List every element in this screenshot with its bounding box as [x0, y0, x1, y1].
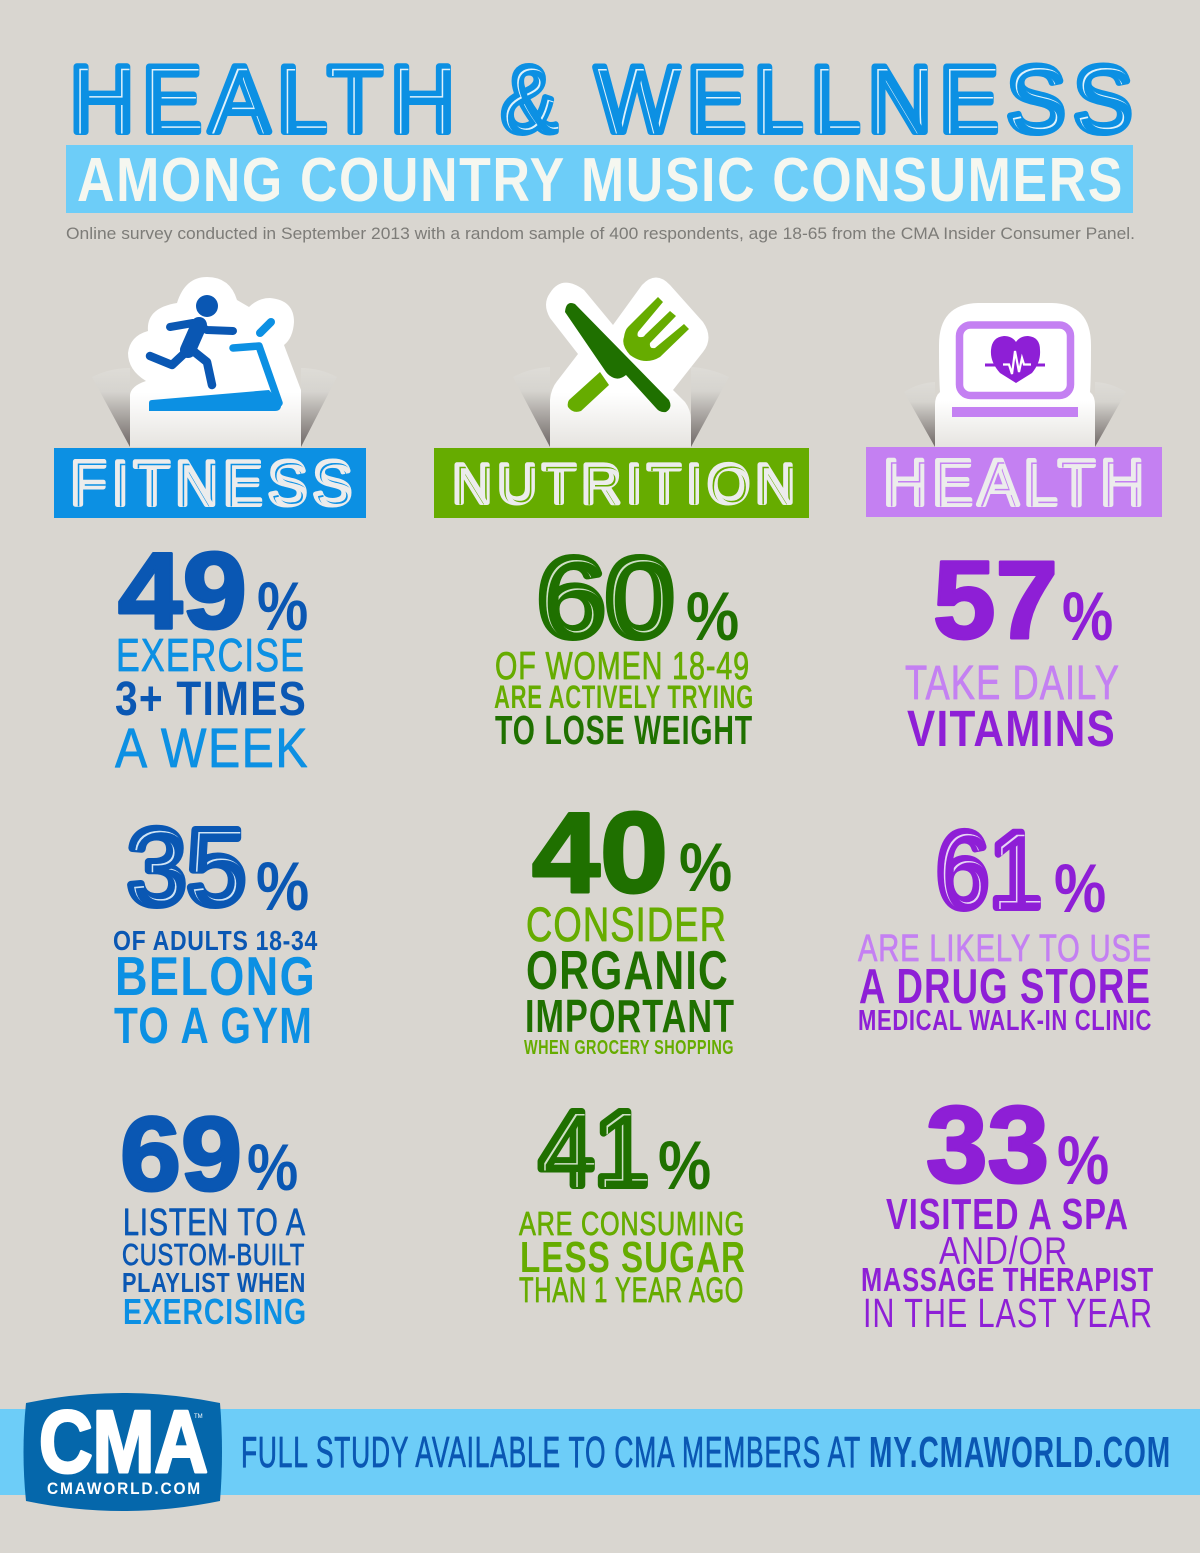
stat: 69% playlist: 69 [120, 1096, 242, 1213]
stat: 69% playlist: LISTEN TO A [123, 1202, 306, 1244]
stat: 69% playlist: EXERCISING [123, 1291, 307, 1332]
stat: 35% gym: BELONG [115, 945, 316, 1007]
title: & [501, 46, 557, 152]
stat: 57% vitamins: VITAMINS [907, 700, 1116, 757]
heading: fitness: FITNESS [70, 450, 358, 518]
heading: nutrition: NUTRITION [452, 452, 800, 514]
stat: 49% exercise: A WEEK [115, 716, 309, 779]
survey note: Online survey conducted in September 2013 with a random sample of 400 respondents, age 18-65 from the CMA Insider Consumer Panel. [66, 224, 1135, 243]
title: & [504, 48, 560, 154]
stat: 40% organic: % [679, 829, 734, 906]
title: HEALTH [72, 48, 465, 154]
stat: 35% gym: TO A GYM [114, 997, 313, 1054]
heading: fitness: FITNESS [73, 452, 360, 520]
stat: 41% less sugar [519, 1090, 746, 1310]
stat: 40% organic: CONSIDER [526, 899, 727, 952]
stat: 33% spa: AND/OR [939, 1230, 1068, 1273]
stat: 40% organic: IMPORTANT [525, 990, 735, 1042]
heading: health: HEALTH [886, 448, 1152, 520]
stat: 33% spa: 33 [926, 1084, 1049, 1206]
stat: 40% organic: 40 [532, 790, 668, 917]
logo: CMA: TM [194, 1414, 203, 1420]
stat: 57% vitamins: 57 [933, 539, 1058, 662]
icon: computer with heart [904, 303, 1126, 447]
stat: 49% exercise: 3+ TIMES [115, 673, 307, 726]
stat: 60% lose weight: 60 [537, 536, 674, 660]
title: HEALTH [70, 46, 462, 152]
stat: 49% exercise: 49 [118, 530, 247, 652]
stat: 35% gym: 35 [127, 806, 246, 927]
stat: 35% gym: % [256, 848, 311, 925]
stat: 60% lose weight: % [686, 578, 741, 655]
stat: 41% less sugar: LESS SUGAR [520, 1234, 746, 1282]
stat: 69% playlist [120, 1096, 307, 1332]
stat: 57% vitamins: TAKE DAILY [905, 657, 1120, 710]
stat: 40% organic [524, 790, 735, 1059]
stat: 61% walk-in clinic: 61 [939, 811, 1045, 932]
logo: CMA: CMA [39, 1392, 208, 1491]
stat: 60% lose weight: ARE ACTIVELY TRYING [494, 679, 754, 715]
stat: 33% spa: % [1057, 1122, 1111, 1199]
stat: 60% lose weight: TO LOSE WEIGHT [495, 707, 753, 753]
icon: treadmill runner [92, 277, 337, 447]
stat: 57% vitamins: % [1062, 578, 1115, 655]
stat: 40% organic: ORGANIC [526, 939, 729, 1001]
header [66, 46, 1142, 243]
stat: 61% walk-in clinic: 61 [936, 809, 1042, 930]
stat: 69% playlist: CUSTOM-BUILT [122, 1238, 305, 1272]
stat: 69% playlist: % [247, 1130, 300, 1204]
stat: 35% gym: OF ADULTS 18-34 [113, 925, 318, 956]
stat: 41% less sugar: % [658, 1127, 713, 1204]
stat: 49% exercise: % [257, 568, 310, 645]
stat: 61% walk-in clinic [858, 809, 1152, 1037]
stat: 35% gym: 35 [130, 808, 249, 929]
stat: 41% less sugar: ARE CONSUMING [519, 1206, 745, 1243]
title [70, 46, 1142, 154]
stat: 57% vitamins [905, 539, 1120, 757]
stat: 49% exercise: EXERCISE [116, 629, 305, 681]
stat: 41% less sugar: 41 [542, 1092, 652, 1210]
stat: 33% spa [861, 1084, 1154, 1336]
title: WELLNESS [598, 48, 1142, 154]
stat: 60% lose weight [494, 536, 754, 753]
heading: health: HEALTH [884, 446, 1150, 518]
stat: 40% organic: WHEN GROCERY SHOPPING [524, 1037, 734, 1059]
panel: nutrition [434, 278, 809, 1310]
logo: CMA: CMAWORLD.COM [47, 1479, 202, 1498]
stat: 35% gym [113, 806, 318, 1054]
footer band [0, 1392, 1200, 1511]
stat: 41% less sugar: 41 [539, 1090, 649, 1208]
stat: 49% exercise [115, 530, 310, 779]
stat: 41% less sugar: THAN 1 YEAR AGO [519, 1271, 744, 1310]
panel: health [858, 303, 1162, 1336]
title: WELLNESS [595, 46, 1140, 152]
stat: 60% lose weight: OF WOMEN 18-49 [495, 645, 750, 688]
stat: 60% lose weight: 60 [540, 538, 677, 662]
panel: fitness [54, 277, 366, 1332]
stat: 69% playlist: PLAYLIST WHEN [122, 1267, 306, 1298]
icon: knife and fork [513, 278, 729, 447]
stat: 61% walk-in clinic: % [1054, 850, 1108, 927]
heading: nutrition: NUTRITION [455, 454, 803, 516]
